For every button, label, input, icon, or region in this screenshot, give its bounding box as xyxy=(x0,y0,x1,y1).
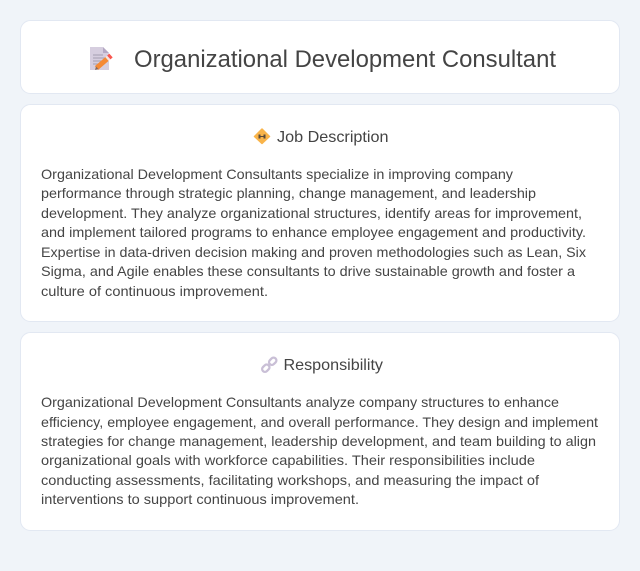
text block: job description: Organizational Development Consultants specialize in improving company xyxy=(41,166,513,182)
text block: job description: Expertise in data-driven decision making and proven methodologies such as Lean, Six xyxy=(41,244,586,260)
text block: responsibility: strategies for change management, leadership development, and team building to align xyxy=(41,433,596,449)
icon: document with pencil xyxy=(90,47,111,70)
text block: responsibility xyxy=(41,394,598,507)
text block: responsibility: interventions to support continuous improvement. xyxy=(41,491,359,507)
text block: responsibility: Organizational Development Consultants analyze company structures to enhance xyxy=(41,394,559,410)
text block: job description xyxy=(41,166,586,299)
heading: job description: Job Description xyxy=(277,129,388,146)
panel: job description xyxy=(20,104,620,322)
text block: responsibility: conducting assessments, facilitating workshops, and measuring the impact of xyxy=(41,472,539,488)
text block: job description: Sigma, and Agile enables these consultants to drive sustainable growth and foster a xyxy=(41,263,575,279)
text block: job description: development. They analyze organizational structures, identify areas for improvement, xyxy=(41,205,582,221)
text block: job description: and implement tailored programs to enhance employee engagement and productivity. xyxy=(41,224,586,240)
title: Organizational Development Consultant xyxy=(134,46,556,73)
icon: chain link xyxy=(261,356,278,373)
panel: title card xyxy=(20,20,620,94)
heading: responsibility: Responsibility xyxy=(284,357,383,374)
panel: responsibility xyxy=(20,332,620,530)
text block: job description: culture of continuous improvement. xyxy=(41,283,268,299)
text block: responsibility: organizational goals with workforce capabilities. Their responsibilities include xyxy=(41,452,535,468)
icon: diamond sign xyxy=(254,129,270,144)
text block: job description: performance through strategic planning, change management, and leadership xyxy=(41,185,536,201)
text block: responsibility: efficiency, employee engagement, and overall performance. They design and implement xyxy=(41,414,598,430)
